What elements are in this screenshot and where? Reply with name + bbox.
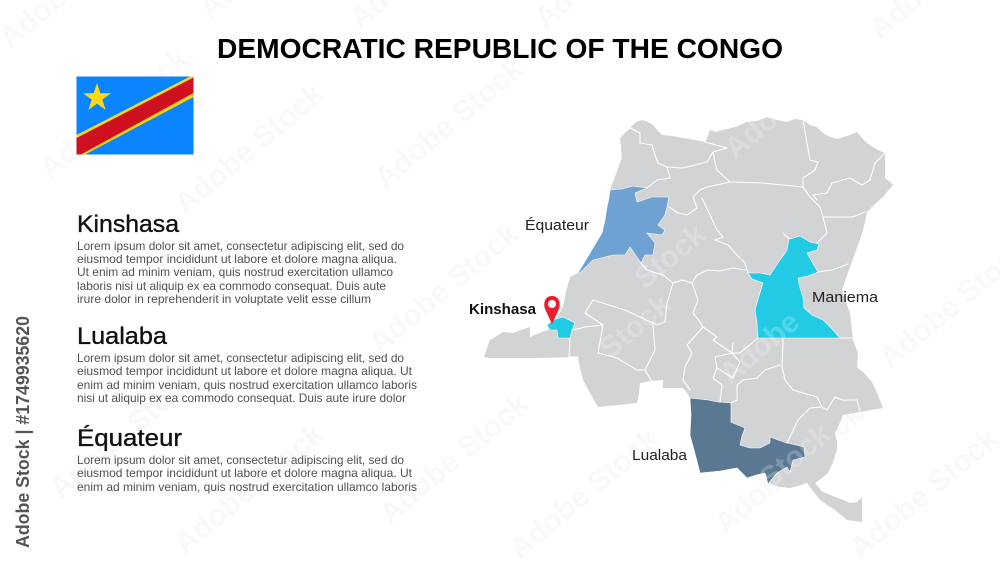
text block: Kinshasa: Kinshasa [77,211,180,238]
text block: Lualaba: Lorem ipsum dolor sit amet, consectetur adipiscing elit, sed do [77,351,404,365]
province borders [630,128,727,168]
text block: Lualaba: enim ad minim veniam, quis nostrud exercitation ullamco laboris [77,378,417,392]
text: Adobe Stock [33,42,195,185]
text: Adobe Stock [373,387,535,530]
text block: Lualaba: nisi ut aliquip ex ea commodo consequat. Duis aute irure dolor [77,391,406,405]
label: Kinshasa: Kinshasa [469,301,537,318]
label: Lualaba: Lualaba [632,447,688,464]
province: Maniema [748,233,840,338]
text block: Équateur: Lorem ipsum dolor sit amet, consectetur adipiscing elit, sed do [77,453,404,467]
province: Lualaba [690,398,805,484]
text block: Kinshasa: Ut enim ad minim veniam, quis nostrud exercitation ullamco [77,265,393,279]
text block: Kinshasa: laboris nisi ut aliquip ex ea commodo consequat. Duis aute [77,279,386,293]
province: Kinshasa [547,317,575,338]
text: Adobe Stock [368,52,530,195]
text block: Lualaba: eiusmod tempor incididunt ut labore et dolore magna aliqua. Ut [77,364,413,378]
side credit: Adobe Stock | #1749935620 [13,316,33,548]
text block: Équateur: Équateur [77,425,182,452]
text: Adobe Stock [43,362,205,505]
text block: Lualaba: Lualaba [77,323,168,350]
text: Adobe Stock [503,422,665,563]
title: DEMOCRATIC REPUBLIC OF THE CONGO [217,33,783,64]
text block: Kinshasa: eiusmod tempor incididunt ut labore et dolore magna aliqua. [77,252,397,266]
province: Équateur [578,186,669,273]
icon: location pin [544,296,560,324]
text: Adobe Stock [168,417,330,560]
icon: flag of DR Congo [76,76,194,154]
text: Adobe [713,305,806,390]
text: Stock [593,287,677,365]
text block: Équateur [77,425,417,494]
text block: Lualaba [77,323,417,405]
text: Adobe Stock [708,397,870,540]
text block: Kinshasa [77,211,404,306]
text: Adobe Stock [168,77,330,220]
text: Adobe Stock [363,217,525,360]
text block: Kinshasa: irure dolor in reprehenderit in voluptate velit esse cillum [77,292,371,306]
text: Stock [753,417,837,495]
label: Équateur: Équateur [525,217,589,234]
text: Adobe Stock [718,22,880,165]
map: DR Congo provinces [484,117,893,522]
text block: Équateur: enim ad minim veniam, quis nostrud exercitation ullamco laboris [77,480,417,494]
country outline [484,117,893,522]
text block: Équateur: eiusmod tempor incididunt ut labore et dolore magna aliqua. Ut [77,466,413,480]
text block: Kinshasa: Lorem ipsum dolor sit amet, consectetur adipiscing elit, sed do [77,239,404,253]
text: Stock [628,217,712,295]
label: Maniema: Maniema [812,289,879,306]
